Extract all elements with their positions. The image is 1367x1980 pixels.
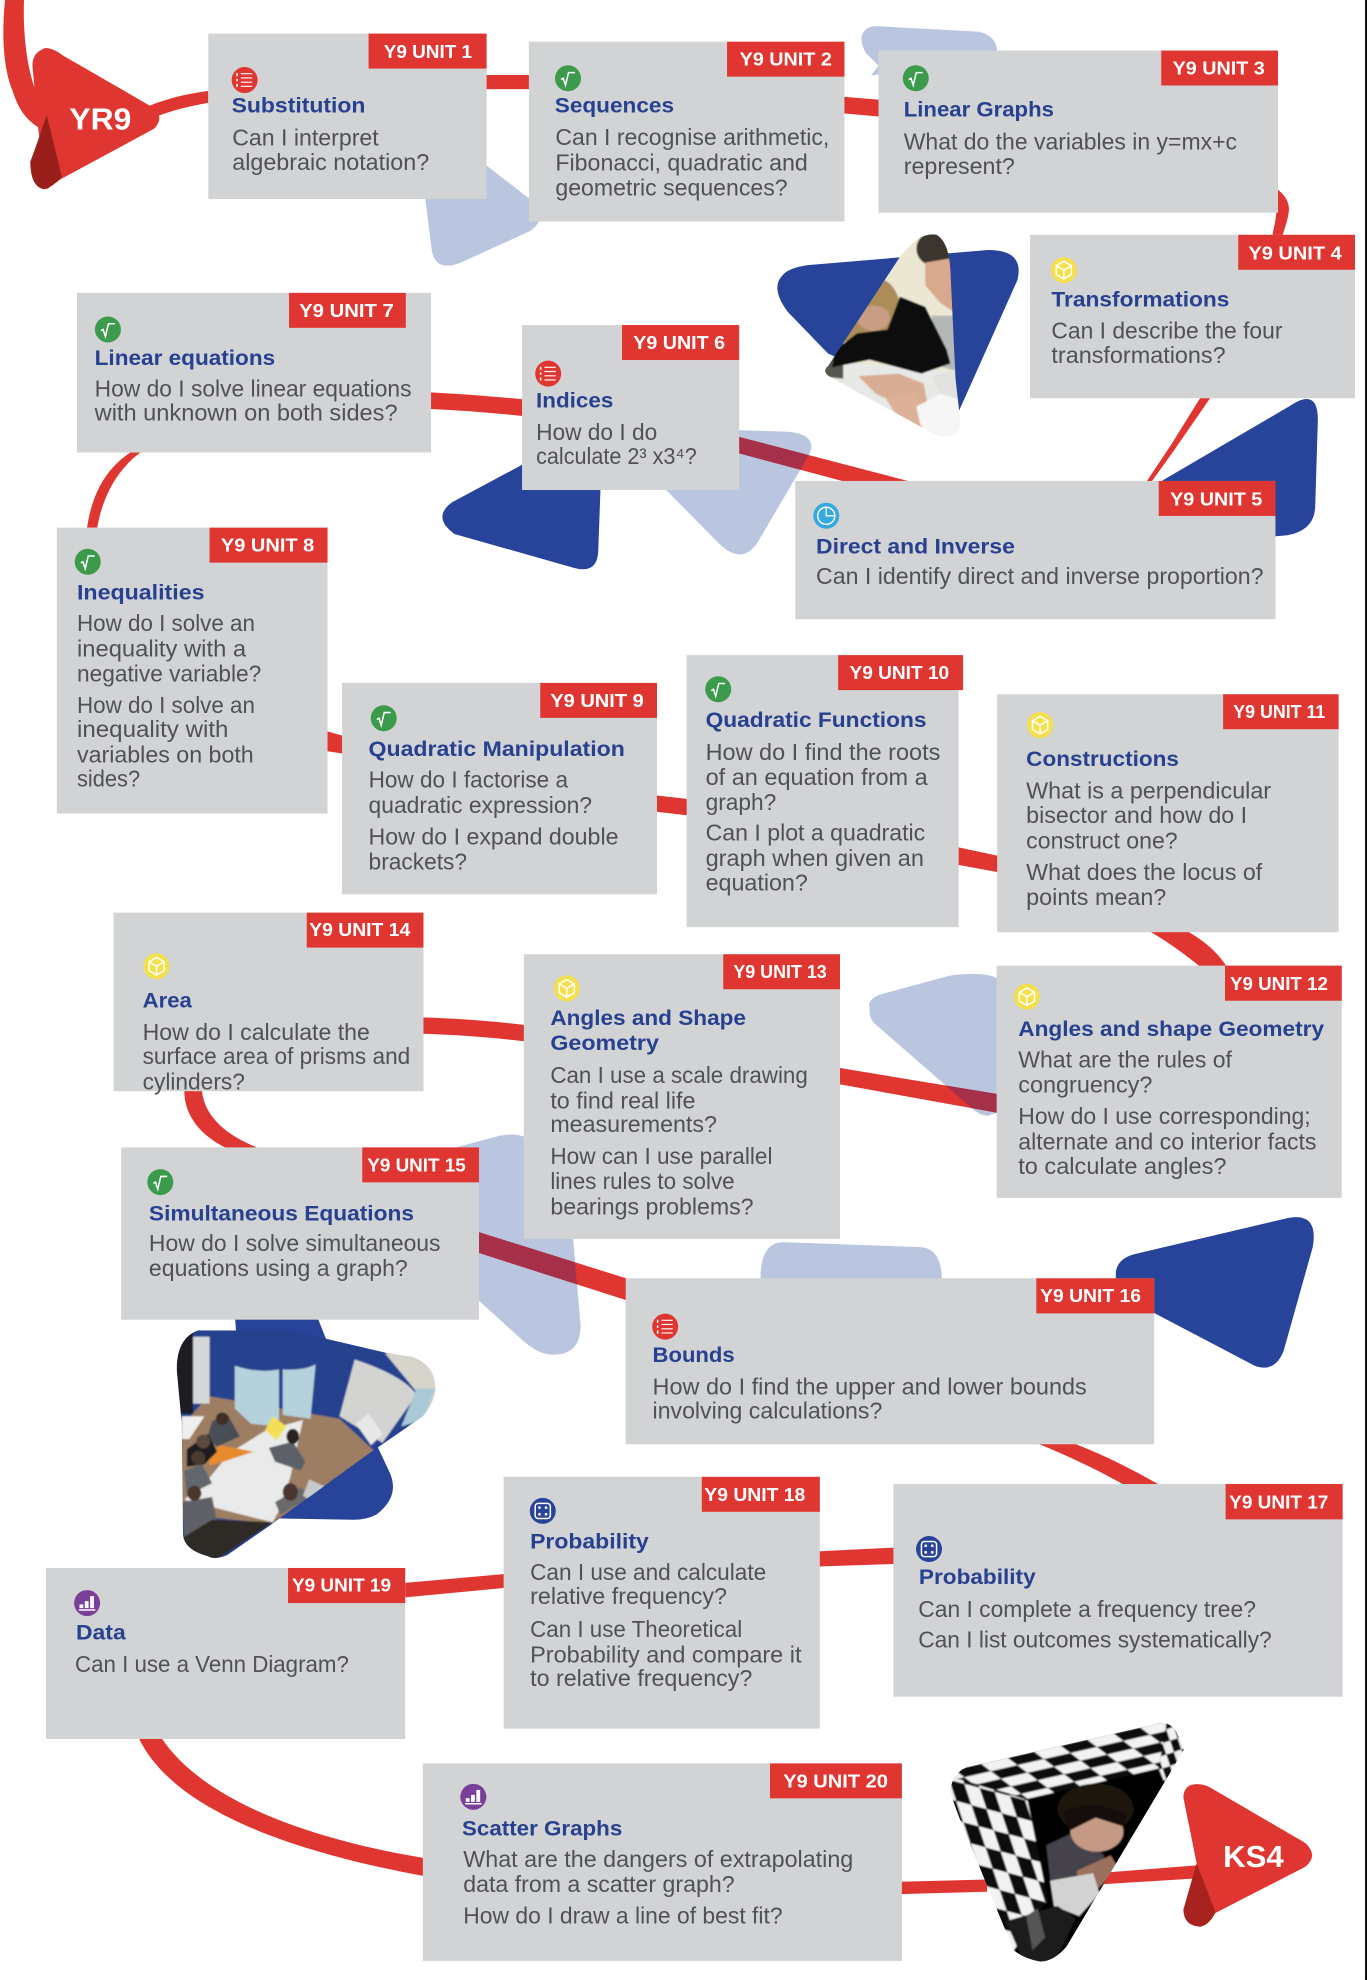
- unit 18 questions: Can I use Theoretical: [530, 1616, 742, 1642]
- unit 2 question: Fibonacci, quadratic and: [555, 149, 808, 175]
- unit 17 questions: Can I complete a frequency tree?: [918, 1596, 1256, 1622]
- icon: cube: [1051, 257, 1077, 283]
- unit 9 title: Quadratic Manipulation: [369, 738, 625, 761]
- unit 8 tag: Y9 UNIT 8: [221, 535, 314, 556]
- unit 11 questions: [1026, 777, 1272, 910]
- icon: square root: [95, 316, 121, 342]
- icon: square root: [705, 676, 731, 702]
- unit 7 title: Linear equations: [95, 347, 275, 370]
- unit 9 tag: [540, 683, 657, 718]
- photo: chess player in checkerboard triangle: [950, 1722, 1184, 1962]
- unit 6 question: [536, 419, 697, 469]
- unit 20 questions: How do I draw a line of best fit?: [463, 1903, 783, 1929]
- unit 7 panel: Linear equations: [77, 293, 431, 453]
- unit 1 title: Substitution: [232, 95, 365, 118]
- unit 15 question: equations using a graph?: [149, 1255, 408, 1281]
- unit 14 title: Area: [143, 989, 192, 1012]
- unit 4 title: Transformations: [1051, 289, 1229, 312]
- icon: dice: [530, 1498, 556, 1524]
- unit 5 tag: [1159, 481, 1275, 516]
- unit 12 questions: What are the rules of: [1018, 1047, 1233, 1073]
- unit 18 panel: Probability: [504, 1477, 820, 1729]
- unit 14 tag: Y9 UNIT 14: [309, 919, 411, 940]
- unit 17 title: Probability: [919, 1566, 1036, 1589]
- unit 10 questions: Can I plot a quadratic: [706, 820, 925, 846]
- unit 11 questions: points mean?: [1026, 884, 1166, 910]
- unit 13 title: Angles and Shape: [550, 1007, 746, 1030]
- unit 10 title: Quadratic Functions: [706, 709, 926, 732]
- KS4 end marker: [1183, 1784, 1312, 1927]
- unit 4 question: Can I describe the four: [1051, 317, 1283, 343]
- unit 9 panel: Quadratic Manipulation: [342, 683, 657, 894]
- unit 10 questions: graph?: [706, 789, 776, 815]
- pale triangle behind unit 12: [869, 974, 1003, 1116]
- unit 19 panel: Data: [46, 1568, 405, 1739]
- unit 15 question: How do I solve simultaneous: [149, 1230, 441, 1256]
- unit 11 panel: Constructions: [997, 694, 1339, 932]
- icon: bar chart: [74, 1590, 100, 1616]
- pale triangle behind units 1 and 2: [424, 164, 539, 266]
- unit 18 questions: Probability and compare it: [530, 1641, 802, 1667]
- unit 11 questions: construct one?: [1026, 828, 1178, 854]
- unit 18 tag: Y9 UNIT 18: [704, 1484, 805, 1505]
- unit 12 questions: to calculate angles?: [1018, 1153, 1227, 1179]
- unit 12 questions: [1018, 1047, 1317, 1179]
- unit 1 question: Can I interpret: [232, 125, 379, 151]
- unit 18 questions: to relative frequency?: [530, 1665, 752, 1691]
- unit 13 questions: lines rules to solve: [550, 1168, 735, 1194]
- unit 8 questions: [77, 610, 261, 791]
- unit 2 tag: Y9 UNIT 2: [740, 49, 832, 70]
- unit 19 question: Can I use a Venn Diagram?: [75, 1651, 349, 1677]
- unit 11 tag: [1223, 694, 1339, 729]
- unit 5 question: Can I identify direct and inverse proportion?: [816, 563, 1263, 589]
- icon: cube: [144, 953, 170, 979]
- unit 17 panel: Probability: [893, 1484, 1343, 1697]
- icon: numbered list: [652, 1314, 678, 1340]
- icon: cube: [1027, 712, 1053, 738]
- unit 19 title: Data: [76, 1622, 126, 1645]
- dark blue triangle near unit 16: [1116, 1217, 1314, 1368]
- icon: square root: [147, 1169, 173, 1195]
- icon: numbered list: [232, 67, 258, 93]
- unit 3 panel: Linear Graphs: [879, 51, 1278, 213]
- pale triangle behind units 13 and 15: [429, 1134, 581, 1355]
- unit 13 title: Geometry: [550, 1032, 659, 1055]
- unit 12 title: Angles and shape Geometry: [1018, 1018, 1324, 1041]
- unit 11 title: Constructions: [1026, 748, 1179, 771]
- unit 5 panel: Direct and Inverse: [795, 481, 1275, 619]
- unit 18 questions: [530, 1559, 802, 1691]
- unit 13 questions: How can I use parallel: [550, 1143, 772, 1169]
- unit 17 questions: [918, 1596, 1272, 1652]
- unit 17 tag: [1226, 1484, 1343, 1519]
- unit 8 tag: [210, 528, 328, 563]
- unit 10 questions: of an equation from a: [706, 764, 928, 790]
- unit 15 question: [149, 1230, 441, 1281]
- unit 14 tag: [307, 913, 423, 948]
- unit 18 title: Probability: [530, 1531, 649, 1554]
- pale shape behind unit 16: [761, 1242, 942, 1288]
- unit 1 panel: Substitution: [208, 34, 487, 199]
- unit 14 question: cylinders?: [143, 1068, 245, 1094]
- unit 7 question: [94, 375, 411, 425]
- unit 6 panel: Indices: [522, 325, 739, 490]
- unit 10 questions: equation?: [706, 869, 808, 895]
- unit 11 questions: What is a perpendicular: [1026, 777, 1272, 803]
- unit 11 tag: Y9 UNIT 11: [1233, 701, 1325, 722]
- unit 13 panel: Angles and Shape Geometry: [524, 954, 840, 1239]
- unit 20 title: Scatter Graphs: [462, 1817, 622, 1840]
- unit 20 questions: [463, 1846, 853, 1929]
- unit 9 questions: [369, 767, 618, 875]
- unit 20 questions: data from a scatter graph?: [463, 1871, 735, 1897]
- unit 2 question: [555, 124, 829, 201]
- unit 15 panel: Simultaneous Equations: [121, 1147, 479, 1320]
- unit 20 tag: [770, 1763, 902, 1798]
- unit 11 questions: What does the locus of: [1026, 859, 1263, 885]
- unit 11 questions: bisector and how do I: [1026, 802, 1247, 828]
- unit 2 tag: [727, 42, 844, 77]
- unit 9 questions: brackets?: [369, 849, 467, 875]
- unit 13 questions: to find real life: [550, 1087, 695, 1113]
- unit 8 questions: How do I solve an: [77, 692, 255, 718]
- unit 4 panel: Transformations: [1030, 235, 1355, 398]
- icon: square root: [371, 705, 397, 731]
- unit 6 question: calculate 2³ x3⁴?: [536, 443, 697, 469]
- unit 13 questions: Can I use a scale drawing: [550, 1062, 808, 1088]
- unit 7 tag: Y9 UNIT 7: [299, 300, 394, 321]
- unit 5 title: Direct and Inverse: [816, 535, 1015, 558]
- unit 14 question: How do I calculate the: [143, 1019, 370, 1045]
- unit 20 questions: What are the dangers of extrapolating: [463, 1846, 853, 1872]
- unit 4 question: transformations?: [1051, 342, 1226, 368]
- unit 15 tag: [362, 1147, 479, 1182]
- unit 13 tag: [723, 954, 840, 989]
- unit 18 questions: Can I use and calculate: [530, 1559, 766, 1585]
- unit 19 tag: Y9 UNIT 19: [292, 1575, 391, 1596]
- unit 4 tag: [1238, 235, 1355, 270]
- icon: cube: [1014, 984, 1040, 1010]
- unit 8 questions: variables on both: [77, 741, 254, 767]
- unit 3 question: represent?: [904, 153, 1015, 179]
- unit 8 panel: Inequalities: [57, 528, 328, 814]
- unit 18 tag: [702, 1477, 820, 1512]
- photo: classroom group on blue triangle: [170, 1313, 442, 1565]
- unit 16 title: Bounds: [653, 1344, 735, 1367]
- unit 15 title: Simultaneous Equations: [149, 1203, 414, 1226]
- unit 9 questions: How do I expand double: [369, 823, 618, 849]
- unit 3 title: Linear Graphs: [904, 99, 1054, 122]
- unit 12 questions: alternate and co interior facts: [1018, 1128, 1317, 1154]
- unit 3 question: What do the variables in y=mx+c: [904, 128, 1237, 154]
- unit 12 panel: Angles and shape Geometry: [997, 966, 1342, 1198]
- unit 16 question: How do I find the upper and lower bounds: [653, 1374, 1087, 1400]
- unit 14 question: [143, 1019, 410, 1094]
- unit 2 panel: Sequences: [529, 42, 844, 222]
- dark blue triangle near unit 6: [442, 454, 601, 569]
- unit 8 questions: inequality with a: [77, 635, 247, 661]
- unit 6 tag: [622, 325, 739, 360]
- icon: square root: [75, 549, 101, 575]
- unit 6 title: Indices: [536, 390, 613, 413]
- YR9 start marker: [30, 48, 159, 189]
- unit 10 questions: [706, 739, 940, 895]
- unit 8 title: Inequalities: [77, 582, 204, 605]
- unit 6 tag: Y9 UNIT 6: [633, 332, 725, 353]
- unit 13 title: [550, 1007, 746, 1055]
- YR9 start marker: YR9: [69, 103, 131, 136]
- unit 2 question: geometric sequences?: [555, 175, 788, 201]
- unit 9 questions: How do I factorise a: [369, 767, 568, 793]
- unit 10 tag: [838, 655, 963, 690]
- unit 19 tag: [288, 1568, 405, 1603]
- unit 12 tag: Y9 UNIT 12: [1230, 973, 1328, 994]
- unit 3 tag: [1161, 51, 1278, 85]
- unit 10 panel: Quadratic Functions: [687, 655, 963, 927]
- icon: square root: [903, 65, 929, 91]
- unit 12 tag: [1225, 966, 1342, 1001]
- unit 17 tag: Y9 UNIT 17: [1229, 1491, 1328, 1512]
- unit 9 tag: Y9 UNIT 9: [550, 690, 644, 711]
- unit 5 tag: Y9 UNIT 5: [1170, 489, 1262, 510]
- unit 1 tag: [369, 34, 487, 69]
- unit 7 question: with unknown on both sides?: [94, 399, 398, 425]
- unit 20 tag: Y9 UNIT 20: [783, 1770, 888, 1791]
- icon: pie clock: [813, 503, 839, 529]
- icon: dice: [916, 1536, 942, 1562]
- unit 13 questions: [550, 1062, 808, 1219]
- unit 20 panel: Scatter Graphs: [423, 1763, 902, 1961]
- icon: bar chart: [460, 1784, 486, 1810]
- unit 8 questions: sides?: [77, 765, 140, 791]
- unit 3 tag: Y9 UNIT 3: [1173, 58, 1265, 79]
- unit 13 questions: measurements?: [550, 1111, 717, 1137]
- unit 16 tag: Y9 UNIT 16: [1040, 1285, 1141, 1306]
- unit 8 questions: How do I solve an: [77, 610, 255, 636]
- unit 3 question: [904, 128, 1237, 179]
- unit 8 questions: negative variable?: [77, 661, 261, 687]
- unit 7 question: How do I solve linear equations: [95, 375, 411, 401]
- unit 10 questions: graph when given an: [706, 845, 924, 871]
- pale triangle behind unit 3: [861, 26, 997, 76]
- pale triangle behind units 5 and 6: [631, 429, 811, 554]
- unit 12 questions: congruency?: [1018, 1072, 1152, 1098]
- unit 2 title: Sequences: [555, 95, 674, 118]
- dark blue triangle near unit 5: [1142, 399, 1318, 543]
- icon: cube: [554, 975, 580, 1001]
- unit 2 question: Can I recognise arithmetic,: [555, 124, 829, 150]
- unit 14 panel: Area: [114, 913, 423, 1094]
- unit 4 question: [1051, 317, 1283, 368]
- darkened path overlaps over pale triangles: [478, 437, 997, 1300]
- unit 1 question: [232, 125, 429, 175]
- unit 17 questions: Can I list outcomes systematically?: [918, 1626, 1272, 1652]
- unit 10 tag: Y9 UNIT 10: [849, 662, 949, 683]
- unit 16 tag: [1036, 1278, 1154, 1313]
- unit 9 questions: quadratic expression?: [369, 792, 592, 818]
- unit 1 question: algebraic notation?: [232, 149, 429, 175]
- photo: teacher and pupil on blue triangle: [777, 227, 1019, 442]
- unit 12 questions: How do I use corresponding;: [1018, 1103, 1311, 1129]
- unit 15 tag: Y9 UNIT 15: [367, 1154, 466, 1175]
- unit 14 question: surface area of prisms and: [143, 1043, 410, 1069]
- unit 8 questions: inequality with: [77, 716, 228, 742]
- unit 16 question: involving calculations?: [653, 1398, 882, 1424]
- unit 13 questions: bearings problems?: [550, 1193, 754, 1219]
- unit 13 tag: Y9 UNIT 13: [733, 961, 827, 982]
- unit 6 question: How do I do: [536, 419, 657, 445]
- unit 16 panel: Bounds: [626, 1278, 1154, 1444]
- unit 1 tag: Y9 UNIT 1: [384, 41, 472, 62]
- unit 18 questions: relative frequency?: [530, 1583, 727, 1609]
- unit 16 question: [653, 1374, 1087, 1424]
- icon: numbered list: [535, 361, 561, 387]
- KS4 end marker: KS4: [1223, 1841, 1284, 1874]
- unit 4 tag: Y9 UNIT 4: [1248, 242, 1343, 263]
- unit 7 tag: [289, 293, 406, 328]
- icon: square root: [555, 65, 581, 91]
- unit 10 questions: How do I find the roots: [706, 739, 940, 765]
